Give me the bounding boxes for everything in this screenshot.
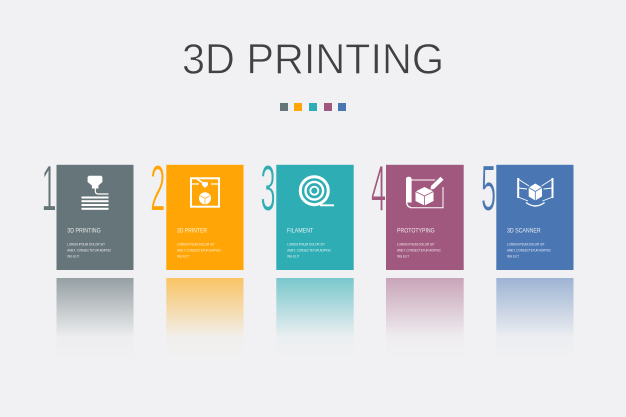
card text: LOREM IPSUM DOLOR SIT xyxy=(67,243,106,247)
panel: 3D scanner xyxy=(481,153,574,270)
reflection 4 xyxy=(386,278,464,360)
card background xyxy=(166,165,244,270)
card text xyxy=(67,243,112,259)
card text: LOREM IPSUM DOLOR SIT xyxy=(287,243,326,247)
card text: AMET, CONSECTETUR ADIPISC xyxy=(177,249,221,253)
card heading: 3D SCANNER xyxy=(507,228,541,234)
icon: blueprint, cube and pencil xyxy=(406,177,444,208)
card text: ING ELIT xyxy=(177,255,190,259)
card heading: 3D PRINTER xyxy=(177,228,207,234)
card background xyxy=(386,165,464,270)
card text: AMET, CONSECTETUR ADIPISC xyxy=(397,249,441,253)
panel: 3D printer xyxy=(150,153,244,270)
reflection 5 xyxy=(496,278,574,360)
number 3: 3 xyxy=(260,153,276,225)
card text: LOREM IPSUM DOLOR SIT xyxy=(397,243,435,247)
card background xyxy=(496,165,574,270)
card background xyxy=(56,165,134,270)
icon: filament spool xyxy=(300,177,334,205)
card text: AMET, CONSECTETUR ADIPISC xyxy=(507,249,551,253)
number 2: 2 xyxy=(150,153,165,225)
icon: cube between scanners xyxy=(518,178,552,206)
panel: 3D printing xyxy=(42,153,134,270)
number 4: 4 xyxy=(371,153,386,225)
card text: ING ELIT xyxy=(397,255,410,259)
reflection 3 xyxy=(276,278,354,360)
card text xyxy=(287,243,332,259)
card text: ING ELIT xyxy=(507,255,520,259)
reflection 2 xyxy=(166,278,244,360)
number 5: 5 xyxy=(481,153,496,225)
icon: extruder and printed layers xyxy=(82,176,108,210)
card text: LOREM IPSUM DOLOR SIT xyxy=(507,243,545,247)
card heading: FILAMENT xyxy=(287,228,313,234)
card heading: PROTOTYPING xyxy=(397,228,435,234)
panel: filament xyxy=(260,153,354,270)
card background xyxy=(276,165,354,270)
card text xyxy=(397,243,441,259)
card text: AMET, CONSECTETUR ADIPISC xyxy=(67,249,112,253)
title: 3D PRINTING xyxy=(182,36,444,84)
card text: LOREM IPSUM DOLOR SIT xyxy=(177,243,215,247)
legend squares xyxy=(280,103,346,111)
icon: printer frame with cube xyxy=(190,178,220,207)
card text: ING ELIT xyxy=(287,255,300,259)
number 1: 1 xyxy=(42,153,57,225)
panel: prototyping xyxy=(371,153,464,270)
card text: ING ELIT xyxy=(67,255,80,259)
card text xyxy=(177,243,221,259)
reflection 1 xyxy=(56,278,134,360)
card text xyxy=(507,243,551,259)
card heading: 3D PRINTING xyxy=(67,228,101,234)
card text: AMET, CONSECTETUR ADIPISC xyxy=(287,249,332,253)
